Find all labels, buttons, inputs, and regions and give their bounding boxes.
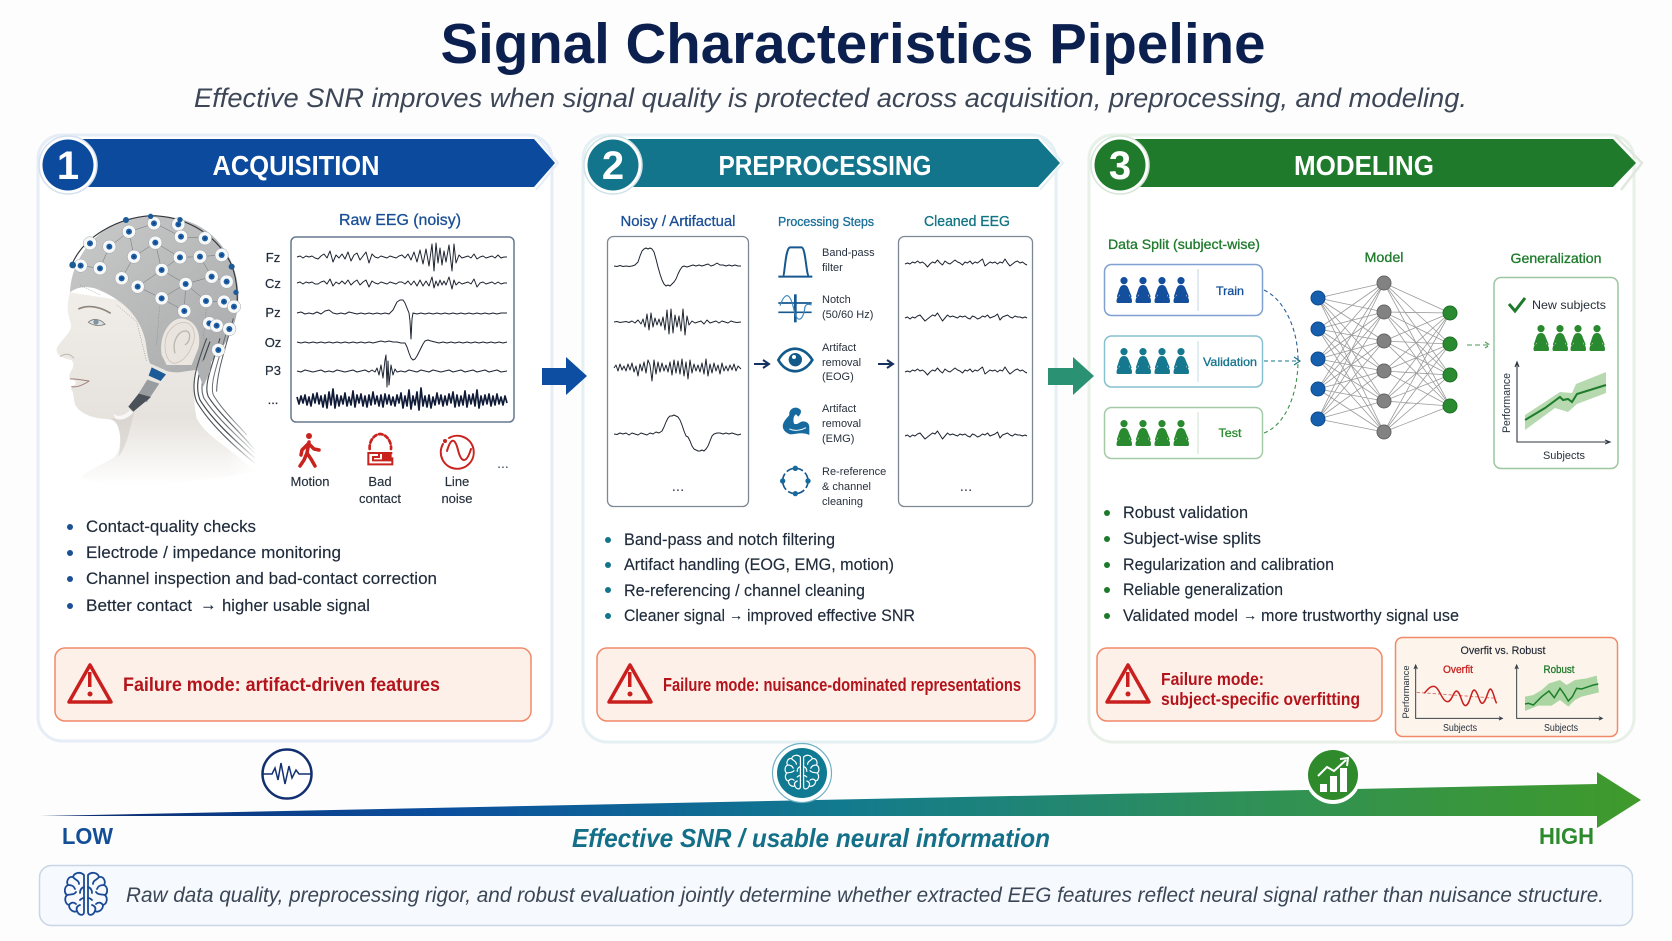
label: high: HIGH	[1539, 823, 1594, 849]
panel: generalization: Subjects	[1543, 450, 1585, 462]
label: bad contact: Bad	[368, 474, 392, 489]
chart: raw EEG traces: ...	[268, 392, 278, 407]
label: EMG: removal	[822, 418, 861, 430]
subtitle: Effective SNR improves when signal quality is protected across acquisition, preprocessing, and modeling.	[194, 83, 1467, 113]
chart: neural network	[1311, 276, 1457, 439]
label: motion: Motion	[290, 474, 330, 489]
callout: failure mode artifact-driven	[55, 648, 531, 721]
dashed arrows: splits into model	[1264, 290, 1300, 433]
chart: overfit vs robust: Subjects	[1443, 723, 1477, 734]
chart: overfit vs robust: Performance	[1401, 666, 1412, 718]
title: Signal Characteristics Pipeline	[440, 12, 1266, 76]
label: re-reference: Re-reference	[822, 466, 886, 478]
header banner: modeling	[1091, 136, 1642, 194]
callout: failure mode overfitting: Failure mode:	[1161, 669, 1264, 689]
axis label: effective SNR: Effective SNR / usable neural information	[572, 823, 1050, 853]
header banner: acquisition: 1	[57, 144, 79, 188]
header banner: modeling: 3	[1109, 144, 1131, 188]
header banner: preprocessing: PREPROCESSING	[718, 150, 932, 181]
chart: cleaned traces	[898, 236, 1032, 506]
bullet list: modeling: Robust validation	[1123, 504, 1248, 522]
split box: train	[1104, 264, 1262, 316]
chart: overfit vs robust: Subjects	[1544, 723, 1578, 734]
heading: processing steps: Processing Steps	[778, 214, 874, 229]
chart: raw EEG traces: Cz	[265, 276, 281, 291]
bullet list: modeling: Subject-wise splits	[1123, 530, 1261, 548]
icon: line noise	[441, 436, 474, 469]
label: bad contact: contact	[359, 491, 401, 506]
icon: heartbeat circle	[262, 750, 312, 798]
heading: data split: Data Split (subject-wise)	[1108, 236, 1260, 252]
label: EMG: Artifact	[822, 403, 856, 415]
panel: generalization: New subjects	[1532, 298, 1606, 312]
icon: brain	[65, 873, 107, 915]
label: notch: (50/60 Hz)	[822, 309, 873, 321]
label: EMG: (EMG)	[822, 433, 854, 445]
label: EOG: removal	[822, 357, 861, 369]
callout: failure mode nuisance: Failure mode: nuisance-dominated representations	[663, 675, 1021, 695]
header banner: preprocessing: 2	[602, 144, 624, 188]
header banner: acquisition	[39, 136, 558, 194]
icon: re-reference ring	[780, 466, 811, 496]
panel: generalization	[1494, 278, 1618, 468]
callout: failure mode overfitting: subject-specific overfitting	[1161, 689, 1360, 709]
arrow: noisy to steps	[754, 360, 769, 368]
bullet list: modeling: more trustworthy signal use	[1261, 607, 1459, 625]
bullet list: acquisition	[67, 518, 437, 615]
bullet list: modeling: →	[1243, 607, 1257, 623]
bullet list: preprocessing: Cleaner signal	[624, 607, 725, 625]
label: line noise: noise	[441, 491, 473, 506]
chart: overfit vs robust: Robust	[1544, 664, 1574, 676]
icon: band-pass filter	[778, 247, 812, 277]
icon: muscle EMG	[783, 408, 809, 435]
label: EOG: Artifact	[822, 342, 856, 354]
icon: eye EOG	[778, 349, 812, 371]
bullet list: acquisition: →	[200, 596, 216, 614]
label: low: LOW	[62, 823, 113, 849]
bullet list: preprocessing	[605, 531, 915, 625]
chart: noisy traces	[608, 236, 748, 506]
chart: raw EEG traces	[265, 237, 514, 422]
icon: bad contact	[368, 434, 392, 464]
callout: failure mode nuisance	[597, 648, 1035, 721]
heading: cleaned EEG: Cleaned EEG	[924, 213, 1010, 230]
label: band-pass filter: Band-pass	[822, 247, 875, 259]
panel: generalization: Performance	[1501, 373, 1513, 433]
arrow: preprocessing to modeling	[1048, 357, 1094, 395]
panel: modeling	[1089, 135, 1642, 742]
bullet list: modeling: Validated model	[1123, 607, 1238, 625]
bullet list: preprocessing: Band-pass and notch filtering	[624, 531, 835, 549]
chart: overfit vs robust: Overfit	[1443, 664, 1473, 676]
header banner: acquisition: ACQUISITION	[212, 150, 380, 181]
chart: overfit vs robust	[1396, 638, 1618, 736]
bullet list: acquisition: Contact-quality checks	[86, 518, 256, 536]
bullet list: preprocessing: →	[729, 607, 743, 623]
split box: test	[1104, 408, 1262, 458]
callout: failure mode artifact-driven: Failure mode: artifact-driven features	[123, 674, 440, 696]
arrow: steps to cleaned	[878, 360, 893, 368]
footer takeaway box	[40, 866, 1632, 926]
label: band-pass filter: filter	[822, 262, 843, 274]
bullet list: acquisition: Channel inspection and bad-contact correction	[86, 570, 437, 588]
panel: preprocessing	[583, 135, 1063, 742]
bullet list: modeling: Regularization and calibration	[1123, 556, 1334, 574]
bullet list: preprocessing: Artifact handling (EOG, EMG, motion)	[624, 556, 894, 574]
split box: validation	[1104, 336, 1262, 387]
split box: train: Train	[1216, 284, 1244, 298]
chart: raw EEG traces: Fz	[266, 250, 280, 265]
chart: cleaned traces: ...	[960, 478, 972, 495]
icon: growth chart circle	[1305, 748, 1361, 804]
callout: failure mode overfitting	[1097, 648, 1382, 721]
icon: motion	[300, 433, 319, 466]
arrow: effective SNR gradient	[40, 772, 1641, 828]
heading: raw EEG: Raw EEG (noisy)	[339, 212, 461, 229]
takeaway text: Raw data quality, preprocessing rigor, and robust evaluation jointly determine whether extracted EEG features reflect neural signal rather than nuisance structure.	[126, 884, 1604, 907]
bullet list: modeling	[1104, 504, 1459, 625]
bullet list: acquisition: higher usable signal	[222, 597, 370, 615]
ellipsis: ...	[497, 455, 509, 471]
illustration: head with EEG cap	[57, 214, 257, 490]
bullet list: preprocessing: improved effective SNR	[747, 607, 915, 625]
label: re-reference: & channel	[822, 481, 871, 493]
chart: overfit vs robust: Overfit vs. Robust	[1460, 645, 1546, 657]
icon: notch	[778, 294, 812, 322]
chart: raw EEG traces: P3	[265, 363, 281, 378]
header banner: preprocessing	[584, 136, 1063, 194]
arrow: acquisition to preprocessing	[542, 357, 587, 395]
label: notch: Notch	[822, 294, 851, 306]
chart: raw EEG traces: Pz	[265, 305, 281, 320]
label: EOG: (EOG)	[822, 371, 854, 383]
icon: brain circle	[772, 744, 832, 802]
chart: noisy traces: ...	[672, 478, 684, 495]
label: re-reference: cleaning	[822, 496, 863, 508]
header banner: modeling: MODELING	[1294, 150, 1434, 181]
heading: generalization: Generalization	[1510, 250, 1602, 266]
bullet list: preprocessing: Re-referencing / channel cleaning	[624, 582, 865, 600]
bullet list: acquisition: Electrode / impedance monitoring	[86, 544, 341, 562]
bullet list: acquisition: Better contact	[86, 597, 192, 615]
dashed arrow: model to generalization	[1467, 342, 1490, 348]
chart: raw EEG traces: Oz	[265, 335, 281, 350]
heading: noisy: Noisy / Artifactual	[620, 213, 736, 230]
label: line noise: Line	[445, 474, 469, 489]
bullet list: modeling: Reliable generalization	[1123, 581, 1283, 599]
heading: model: Model	[1364, 249, 1404, 265]
split box: validation: Validation	[1203, 355, 1257, 369]
split box: test: Test	[1218, 426, 1242, 440]
panel: acquisition	[38, 135, 558, 741]
